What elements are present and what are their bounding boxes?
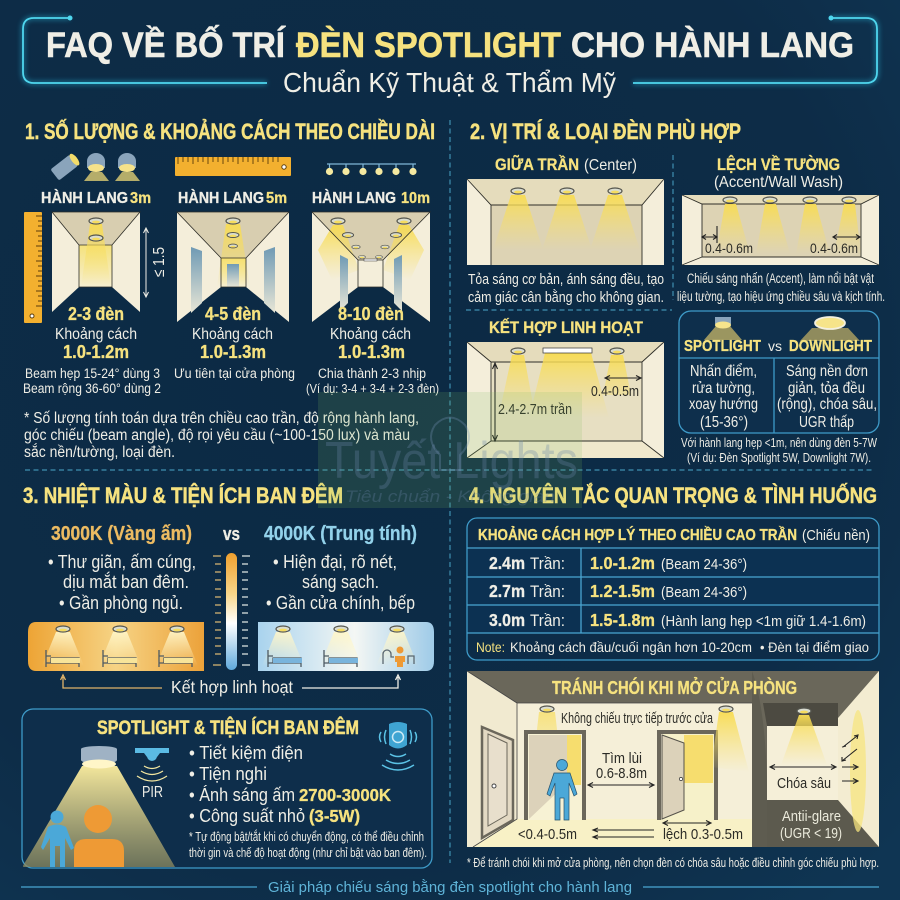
column: corridor 3m: 2-3 đèn [68, 303, 124, 324]
color temperature comparison: vs [223, 524, 240, 544]
column: corridor 5m: 5m [266, 190, 287, 207]
column: corridor 10m: 8-10 đèn [338, 303, 404, 324]
watermark [318, 392, 582, 508]
table: spacing by ceiling height: 2.7m [489, 581, 525, 601]
heading: section 1: 1. SỐ LƯỢNG & KHOẢNG CÁCH THEO CHIỀU DÀI [25, 118, 435, 144]
color temperature comparison [28, 523, 434, 671]
title banner [23, 16, 877, 98]
panel: center ceiling [467, 154, 664, 306]
icon: PIR sensor: PIR [142, 784, 163, 801]
column: corridor 3m: ≤ 1.5 [151, 247, 168, 277]
table: spacing by ceiling height: 3.0m [489, 610, 525, 630]
color temperature comparison: 3000K (Vàng ấm) [51, 523, 192, 545]
list: benefits: * Tự động bật/tắt khi có chuyển động, có thể điều chỉnh [189, 829, 424, 844]
table: spacing by ceiling height: (Chiếu nền) [802, 528, 870, 544]
scene: avoid glare when opening doors [467, 671, 879, 847]
title banner: Chuẩn Kỹ Thuật & Thẩm Mỹ [283, 67, 616, 98]
panel: spotlight vs downlight: SPOTLIGHT [684, 338, 761, 355]
panel: spotlight vs downlight: giản, tỏa đều [788, 380, 865, 397]
door 1 [482, 727, 513, 838]
list: benefits: • Công suất nhỏ [189, 805, 305, 826]
panel: spotlight vs downlight: DOWNLIGHT [789, 338, 872, 355]
column: corridor 3m: Khoảng cách [55, 326, 137, 343]
title banner: ĐÈN SPOTLIGHT [296, 25, 561, 65]
table: spacing by ceiling height: 1.2-1.5m [590, 581, 655, 601]
list: benefits: 2700-3000K [299, 785, 391, 805]
panel: spotlight vs downlight: Nhấn điểm, [690, 362, 757, 380]
column: corridor 5m: HÀNH LANG [178, 188, 264, 207]
table: spacing by ceiling height: Note: [476, 639, 505, 655]
icon: motion sensor [380, 722, 416, 770]
scene: avoid glare when opening doors: Tìm lùi [602, 750, 642, 767]
icons: spotlights [50, 152, 140, 181]
panel: offset to wall: 0.4-0.6m [810, 240, 858, 256]
scene: avoid glare when opening doors: lệch 0.3-0.5m [663, 826, 743, 843]
panel: center ceiling: Tỏa sáng cơ bản, ánh sáng đều, tạo [468, 271, 664, 288]
table: spacing by ceiling height: 2.4m [489, 553, 525, 573]
icon: horizontal ruler [175, 157, 291, 176]
panel: flexible combination: 0.4-0.5m [591, 384, 639, 400]
column: corridor 10m [306, 188, 439, 396]
panel: center ceiling: (Center) [584, 157, 637, 174]
list: benefits: • Ánh sáng ấm [189, 784, 295, 805]
column: corridor 3m: Beam rộng 36-60° dùng 2 [23, 381, 161, 396]
column: corridor 5m: 1.0-1.3m [200, 341, 266, 362]
door 3 [659, 732, 717, 820]
color temperature comparison: • Hiện đại, rõ nét, [273, 551, 397, 572]
table: spacing by ceiling height: Khoảng cách đầu/cuối ngân hơn 10-20cm [510, 639, 752, 655]
column: corridor 10m: Chia thành 2-3 nhịp [318, 366, 426, 381]
table: spacing by ceiling height: Trần: [530, 554, 565, 573]
note: calculation basis: góc chiếu (beam angle), độ rọi yêu cầu (~100-150 lux) và màu [24, 427, 410, 444]
icon: PIR sensor [135, 748, 169, 801]
panel: night-time utility: SPOTLIGHT & TIỆN ÍCH BAN ĐÊM [97, 715, 359, 739]
panel: spotlight vs downlight: (15-36°) [700, 414, 748, 431]
panel: spotlight vs downlight: xoay hướng [689, 396, 758, 413]
watermark: Tiêu chuẩn - Không gian [345, 487, 555, 506]
panel: offset to wall: LỆCH VỀ TƯỜNG [717, 155, 840, 174]
column: corridor 3m: 1.0-1.2m [63, 341, 129, 362]
panel: spotlight vs downlight: UGR thấp [799, 414, 854, 431]
color temperature comparison: • Thư giãn, ấm cúng, [48, 551, 196, 572]
note: calculation basis [24, 410, 419, 461]
door 2 with person [526, 732, 584, 820]
color temperature comparison: sáng sạch. [302, 571, 379, 592]
watermark: Tuyết Lights [325, 432, 578, 490]
panel: offset to wall [677, 155, 885, 304]
section dividers [25, 120, 875, 863]
panel: offset to wall: (Accent/Wall Wash) [714, 174, 843, 191]
panel: center ceiling: GIỮA TRẦN [495, 154, 579, 174]
column: corridor 5m [174, 188, 295, 381]
illustration: lamp and people [23, 746, 175, 867]
table: spacing by ceiling height: Trần: [530, 611, 565, 630]
list: benefits: thời gin và chế độ hoạt động (như chỉ bật vào ban đêm). [189, 846, 427, 860]
panel: center ceiling: cảm giác cân bằng cho không gian. [468, 289, 664, 306]
table: spacing by ceiling height: 1.5-1.8m [590, 610, 655, 630]
heading: section 3: 3. NHIỆT MÀU & TIỆN ÍCH BAN ĐÊM [23, 483, 343, 508]
table: spacing by ceiling height: (Beam 24-36°) [661, 585, 747, 601]
column: corridor 10m: Khoảng cách [330, 326, 411, 343]
scene: avoid glare when opening doors: Antii-glare [782, 808, 841, 825]
column: corridor 3m: Beam hẹp 15-24° dùng 3 [25, 366, 160, 381]
scene: avoid glare when opening doors: Không chiếu trực tiếp trước cửa [561, 711, 714, 727]
title banner: CHO HÀNH LANG [571, 25, 854, 65]
panel: flexible combination: 2.4-2.7m trần [498, 402, 572, 418]
table: spacing by ceiling height: (Hành lang hẹp <1m giữ 1.4-1.6m) [661, 614, 866, 630]
panel: spotlight vs downlight [679, 311, 879, 465]
panel: spotlight vs downlight: rửa tường, [692, 380, 755, 397]
column: corridor 10m: (Ví dụ: 3-4 + 3-4 + 2-3 đèn) [306, 382, 439, 396]
scene: avoid glare when opening doors: <0.4-0.5m [518, 826, 577, 843]
table: spacing by ceiling height: (Beam 24-36°) [661, 557, 747, 573]
color temperature comparison: • Gần cửa chính, bếp [266, 592, 415, 613]
panel: spotlight vs downlight: vs [768, 339, 782, 354]
column: corridor 10m: 1.0-1.3m [338, 341, 405, 362]
table: spacing by ceiling height [467, 518, 879, 660]
column: corridor 3m: HÀNH LANG [41, 188, 128, 207]
panel: spotlight vs downlight: Sáng nền đơn [786, 363, 868, 380]
arrows: flexible combination [60, 675, 400, 697]
color temperature comparison: 4000K (Trung tính) [264, 523, 417, 545]
panel: flexible combination: KẾT HỢP LINH HOẠT [489, 318, 644, 337]
column: corridor 5m: Ưu tiên tại cửa phòng [174, 366, 295, 381]
column: corridor 10m: HÀNH LANG [312, 188, 396, 207]
icon: track lights [326, 164, 417, 175]
table: spacing by ceiling height: • Đèn tại điểm giao [760, 639, 869, 655]
footer tagline: Giải pháp chiếu sáng bằng đèn spotlight cho hành lang [268, 879, 632, 896]
column: corridor 10m: 10m [401, 190, 430, 207]
panel: spotlight vs downlight: (rộng), chóa sâu, [777, 396, 877, 413]
scene: avoid glare when opening doors: Chóa sâu [777, 775, 831, 792]
column: corridor 3m: 3m [130, 190, 151, 207]
column: corridor 5m: Khoảng cách [192, 326, 273, 343]
column: corridor 5m: 4-5 đèn [205, 303, 261, 324]
panel: offset to wall: 0.4-0.6m [705, 240, 753, 256]
list: benefits: • Tiện nghi [189, 763, 267, 784]
table: spacing by ceiling height: 1.0-1.2m [590, 553, 655, 573]
heading: section 2: 2. VỊ TRÍ & LOẠI ĐÈN PHÙ HỢP [470, 119, 741, 144]
list: benefits [189, 742, 427, 860]
title banner: FAQ VỀ BỐ TRÍ [46, 25, 286, 65]
scene: avoid glare when opening doors: 0.6-8.8m [596, 765, 647, 782]
list: benefits: • Tiết kiệm điện [189, 742, 303, 763]
arrows: flexible combination: Kết hợp linh hoạt [171, 677, 293, 697]
panel: flexible combination [467, 318, 664, 458]
color temperature comparison: dịu mắt ban đêm. [63, 571, 189, 592]
panel: night-time utility [22, 709, 432, 868]
column: corridor 3m [23, 188, 168, 396]
table: spacing by ceiling height: KHOẢNG CÁCH HỢP LÝ THEO CHIỀU CAO TRẦN [478, 525, 797, 544]
color temperature comparison: • Gần phòng ngủ. [59, 592, 183, 613]
note: calculation basis: * Số lượng tính toán dựa trên chiều cao trần, độ rộng hành lang, [24, 410, 419, 427]
list: benefits: (3-5W) [309, 806, 360, 826]
scene: avoid glare when opening doors: TRÁNH CHÓI KHI MỞ CỬA PHÒNG [552, 677, 797, 698]
scene: avoid glare when opening doors: (UGR < 19) [780, 825, 842, 842]
table: spacing by ceiling height: Trần: [530, 582, 565, 601]
note: calculation basis: sắc nền/tường, loại đèn. [24, 444, 175, 461]
